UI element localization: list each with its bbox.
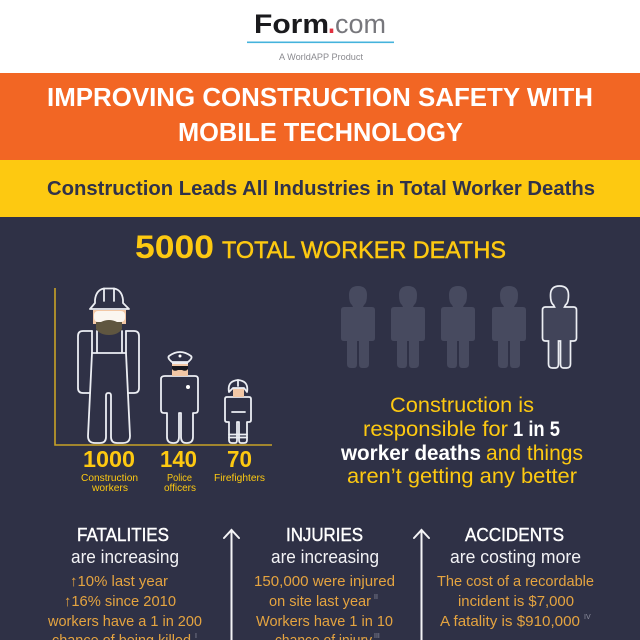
value: firefighters: 70 <box>227 446 252 472</box>
column: fatalities <box>47 525 202 640</box>
callout: one in five: and things <box>486 442 583 465</box>
value: construction workers: 1000 <box>83 446 135 472</box>
title banner <box>0 73 640 160</box>
column: injuries: are increasing <box>271 547 379 567</box>
dark content panel <box>0 217 640 640</box>
column: injuries <box>254 525 395 640</box>
title banner: IMPROVING CONSTRUCTION SAFETY WITH <box>47 82 593 112</box>
column: accidents <box>437 525 594 630</box>
heading: total worker deaths <box>135 229 506 265</box>
column: injuries: INJURIES <box>286 525 363 545</box>
header: logo band: . <box>328 7 335 40</box>
column: fatalities: are increasing <box>71 547 179 567</box>
column: accidents: IV <box>584 614 591 621</box>
arrow: up divider right <box>414 530 429 640</box>
bar chart: deaths by occupation <box>55 288 272 494</box>
value: construction workers: Construction <box>81 473 138 484</box>
callout: one in five: 1 in 5 <box>513 418 560 441</box>
column: injuries: III <box>374 633 380 640</box>
heading: total worker deaths: 5000 <box>135 229 214 265</box>
subtitle banner <box>0 160 640 217</box>
column: fatalities: FATALITIES <box>77 525 169 545</box>
heading: total worker deaths: TOTAL WORKER DEATHS <box>222 237 506 264</box>
callout: one in five: aren’t getting any better <box>347 465 577 488</box>
callout: one in five: Construction is <box>390 394 534 417</box>
subtitle banner: Construction Leads All Industries in Total Worker Deaths <box>47 178 595 200</box>
header: logo band: A WorldAPP Product <box>279 52 363 63</box>
column: injuries: 150,000 were injured <box>254 573 395 590</box>
column: injuries: Workers have 1 in 10 <box>256 613 393 630</box>
column: fatalities: I <box>195 633 197 640</box>
column: accidents: A fatality is $910,000 <box>440 613 580 630</box>
value: firefighters <box>214 446 265 484</box>
header: logo band: Form <box>254 9 329 39</box>
column: accidents: are costing more <box>450 547 581 567</box>
callout: one in five: responsible for <box>363 418 508 441</box>
header: logo band <box>0 0 640 73</box>
column: accidents: The cost of a recordable <box>437 573 594 590</box>
value: construction workers: workers <box>91 483 128 494</box>
callout: one in five <box>340 394 583 488</box>
column: injuries: II <box>374 594 378 601</box>
value: police officers: Police <box>167 473 192 484</box>
icon: construction worker <box>78 288 139 443</box>
column: fatalities: ↑10% last year <box>70 573 168 590</box>
column: accidents: incident is $7,000 <box>458 593 574 610</box>
icon: firefighter <box>225 380 251 443</box>
value: police officers: officers <box>164 483 196 494</box>
column: accidents: ACCIDENTS <box>465 525 564 545</box>
header: logo band: com <box>335 9 386 39</box>
chart axes <box>55 288 272 445</box>
icon row: one in five people <box>341 286 576 368</box>
callout: one in five: worker deaths <box>340 442 481 465</box>
column: injuries: on site last year <box>269 593 371 610</box>
title banner: MOBILE TECHNOLOGY <box>178 117 463 147</box>
value: police officers: 140 <box>160 446 197 472</box>
column: fatalities: workers have a 1 in 200 <box>47 613 202 630</box>
icon: police officer <box>161 352 198 443</box>
column: fatalities: ↑16% since 2010 <box>64 593 176 610</box>
value: police officers <box>160 446 197 494</box>
arrow: up divider left <box>224 530 239 640</box>
value: construction workers <box>81 446 138 494</box>
value: firefighters: Firefighters <box>214 473 265 484</box>
